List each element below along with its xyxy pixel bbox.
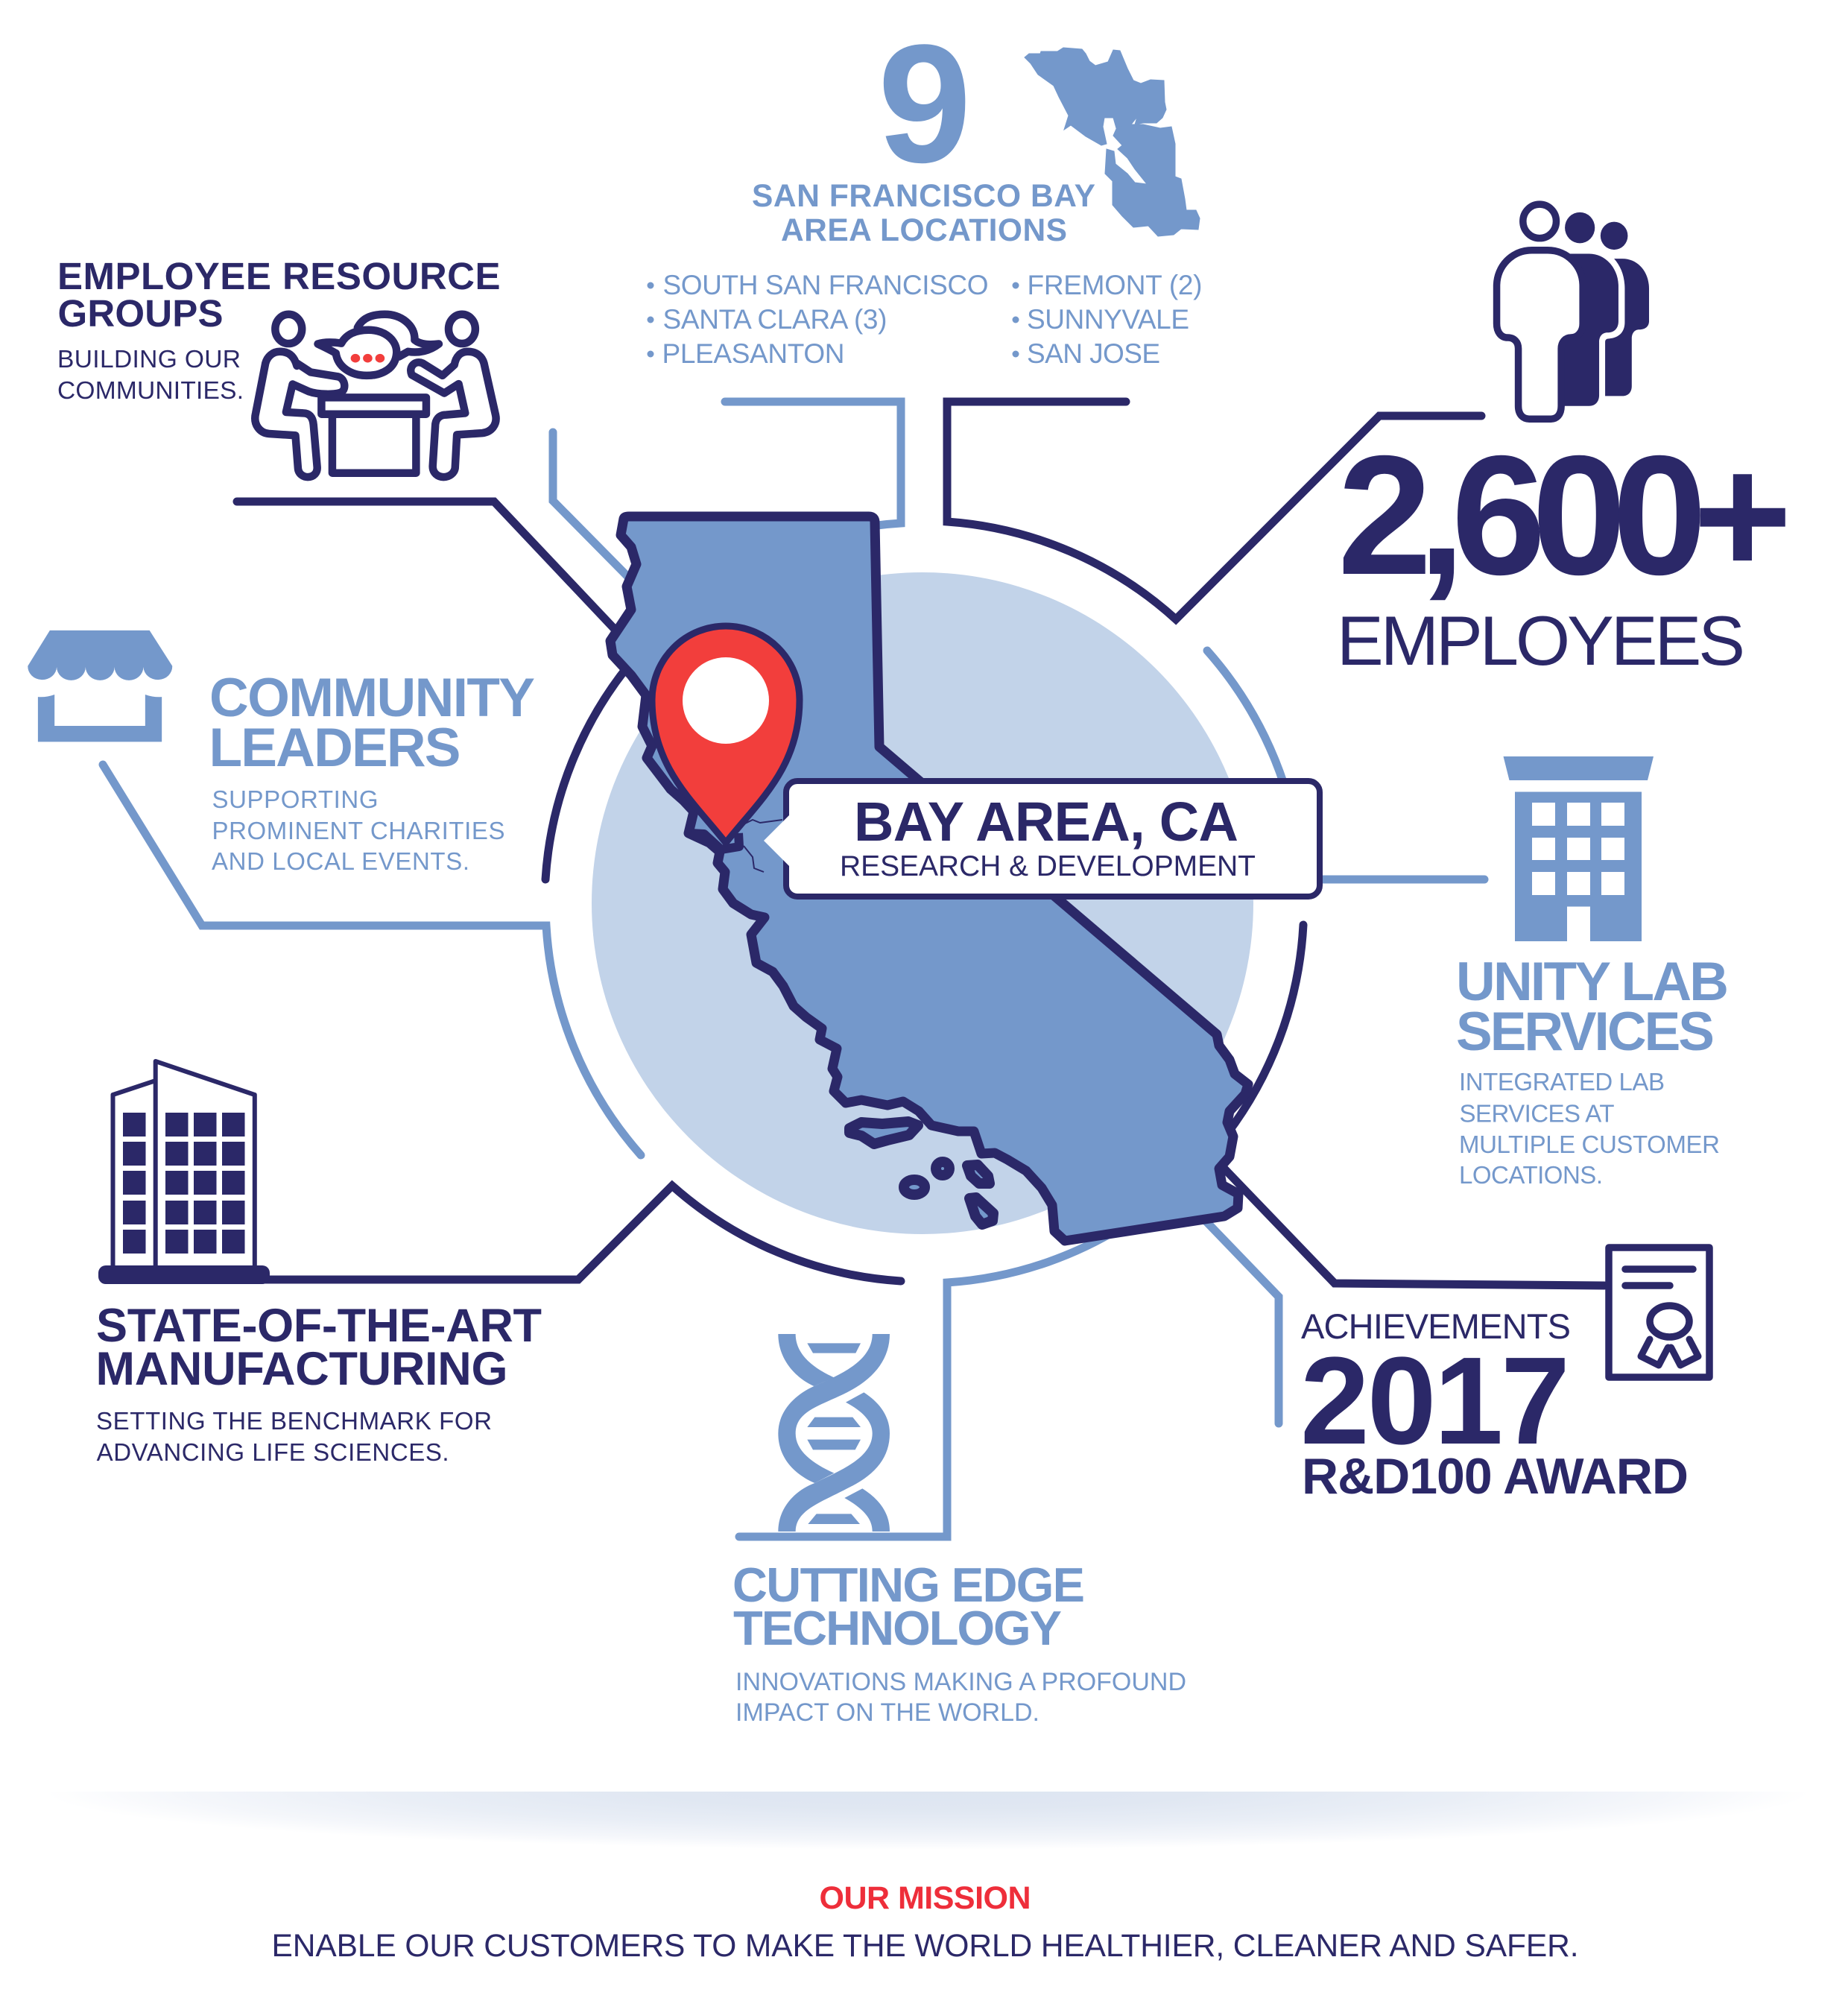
- description: BUILDING OUR: [57, 346, 241, 373]
- panel: bay area locations: [647, 9, 1203, 369]
- heading: AREA LOCATIONS: [781, 213, 1067, 248]
- achievement text: 2017: [1300, 1332, 1570, 1470]
- mission: ENABLE OUR CUSTOMERS TO MAKE THE WORLD HEALTHIER, CLEANER AND SAFER.: [271, 1929, 1578, 1964]
- achievement text: R&D100 AWARD: [1302, 1448, 1689, 1505]
- location list: PLEASANTON: [662, 338, 845, 369]
- coast around bay mouth: [691, 833, 739, 850]
- location list: [647, 270, 1203, 369]
- heading: STATE-OF-THE-ART: [96, 1300, 542, 1352]
- location pin: [652, 626, 800, 843]
- ground shadow: [45, 1792, 1811, 1850]
- heading: GROUPS: [58, 292, 224, 335]
- callout: Bay Area, CA: BAY AREA, CA: [854, 791, 1238, 853]
- achievement text: ACHIEVEMENTS: [1301, 1306, 1571, 1346]
- icon: two people meeting at table: [255, 314, 496, 477]
- description: MULTIPLE CUSTOMER: [1459, 1131, 1720, 1158]
- description: [735, 1668, 1186, 1727]
- panel: employees: [1337, 204, 1792, 680]
- icon: lab building: [1504, 756, 1654, 941]
- description: SUPPORTING: [212, 785, 379, 813]
- heading: EMPLOYEE RESOURCE: [57, 255, 501, 297]
- islands: [849, 1122, 993, 1224]
- description: AND LOCAL EVENTS.: [212, 847, 469, 875]
- location list: SOUTH SAN FRANCISCO: [663, 270, 988, 300]
- description: PROMINENT CHARITIES: [212, 817, 505, 844]
- mission: [271, 1880, 1578, 1964]
- california map: [610, 516, 1248, 1241]
- panel: employee resource groups: [57, 255, 501, 477]
- heading: [209, 668, 535, 778]
- panel: unity lab services: [1456, 756, 1729, 1189]
- description: SERVICES AT: [1459, 1100, 1614, 1127]
- callout: Bay Area, CA: [764, 781, 1320, 897]
- stat: 2,600+: 2,600+: [1338, 421, 1792, 610]
- panel: cutting edge technology: [732, 1334, 1186, 1727]
- location list: SANTA CLARA (3): [663, 304, 887, 335]
- heading: LEADERS: [209, 718, 461, 778]
- description: [96, 1407, 492, 1466]
- location list: SAN JOSE: [1027, 338, 1160, 369]
- heading: [1456, 952, 1729, 1062]
- panel: achievements: [1300, 1248, 1709, 1505]
- heading: COMMUNITY: [209, 668, 535, 728]
- description: [1459, 1068, 1720, 1189]
- heading: MANUFACTURING: [95, 1343, 508, 1395]
- icon: group of people: [1497, 204, 1649, 419]
- heading: UNITY LAB: [1456, 952, 1729, 1012]
- light background circle: [592, 572, 1253, 1234]
- connector lines and ring arcs: [103, 402, 1604, 1537]
- heading: [732, 1558, 1085, 1655]
- mission: OUR MISSION: [820, 1880, 1031, 1916]
- icon: bay area map: [1025, 48, 1200, 236]
- big number 9: 9: [878, 9, 972, 197]
- heading: SAN FRANCISCO BAY: [752, 179, 1095, 214]
- heading: SERVICES: [1456, 1002, 1715, 1062]
- description: SETTING THE BENCHMARK FOR: [96, 1407, 492, 1435]
- icon: certificate: [1609, 1248, 1709, 1377]
- location list: FREMONT (2): [1027, 270, 1203, 300]
- heading: CUTTING EDGE: [732, 1558, 1085, 1612]
- heading: [95, 1300, 542, 1395]
- icon: storefront: [28, 630, 172, 742]
- description: INNOVATIONS MAKING A PROFOUND: [735, 1668, 1186, 1696]
- description: IMPACT ON THE WORLD.: [735, 1698, 1040, 1727]
- panel: state-of-the-art manufacturing: [95, 1061, 542, 1466]
- location list: SUNNYVALE: [1027, 304, 1189, 335]
- description: COMMUNITIES.: [57, 377, 244, 405]
- panel: community leaders: [28, 630, 535, 875]
- icon: factory building: [98, 1061, 270, 1284]
- description: [212, 785, 505, 875]
- description: LOCATIONS.: [1459, 1161, 1603, 1189]
- description: [57, 346, 244, 405]
- description: ADVANCING LIFE SCIENCES.: [97, 1438, 449, 1466]
- heading: [752, 179, 1095, 248]
- callout: Bay Area, CA: RESEARCH & DEVELOPMENT: [840, 850, 1256, 882]
- description: INTEGRATED LAB: [1459, 1068, 1665, 1096]
- icon: dna helix: [778, 1334, 890, 1531]
- heading: TECHNOLOGY: [733, 1601, 1062, 1655]
- heading: [57, 255, 501, 335]
- achievement text: [1300, 1306, 1689, 1505]
- label: employees: EMPLOYEES: [1337, 601, 1745, 680]
